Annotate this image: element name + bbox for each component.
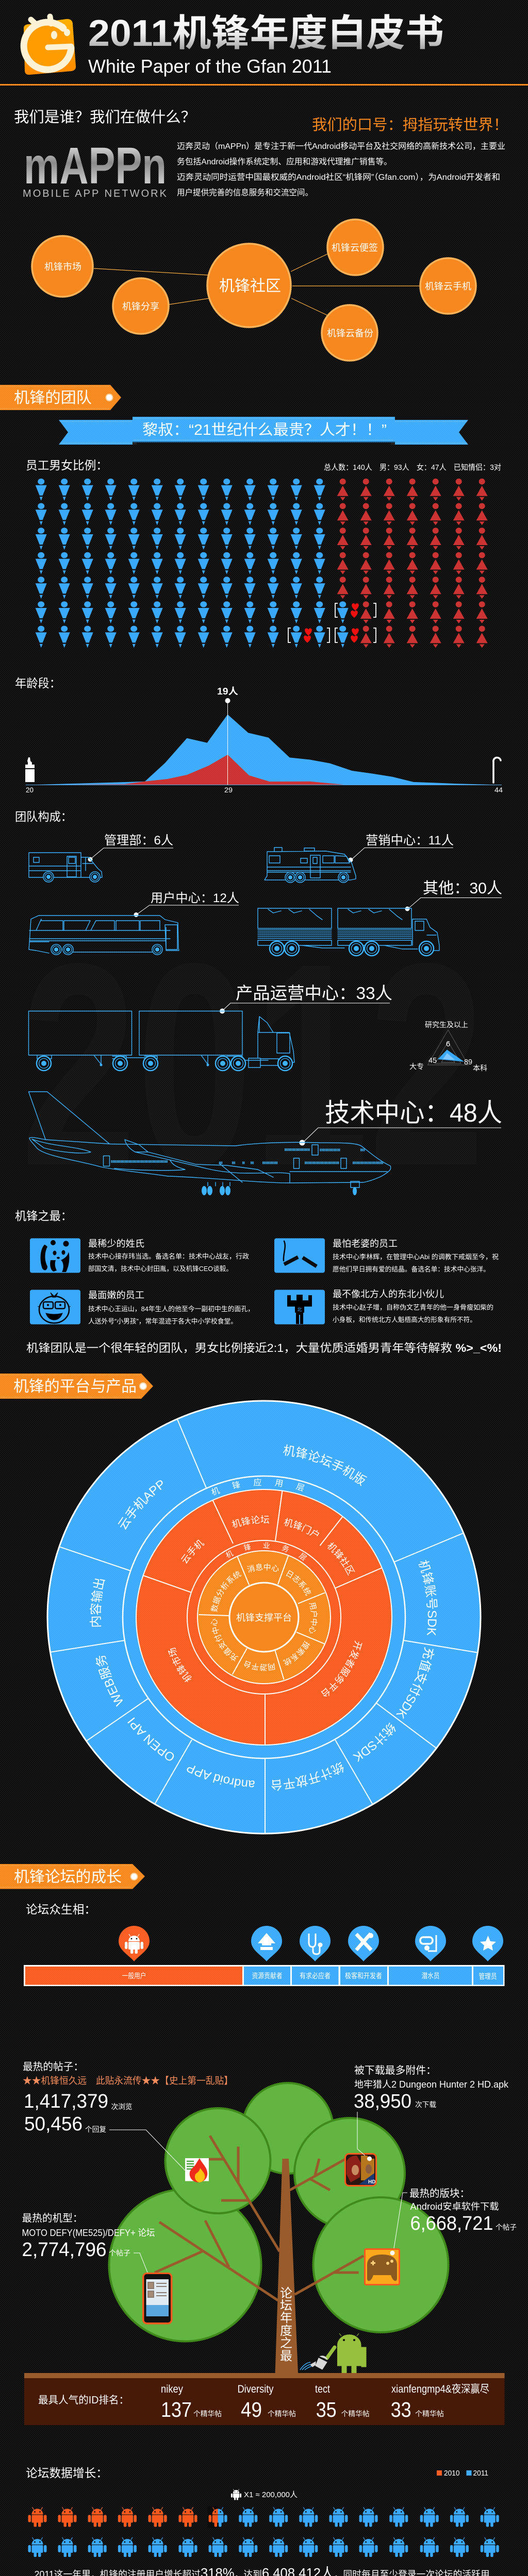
callout: others: 其他：30人	[423, 880, 502, 897]
vehicle: motorhome	[265, 848, 356, 883]
ring: support systems: 网游平台	[244, 1660, 275, 1671]
card: youngest-looking: 技术中心王运山，84年生人的他至今一副初中生的面孔，	[88, 1305, 254, 1313]
callout: hottest board: 6,668,721	[410, 2213, 493, 2234]
card: afraid of wife: 最怕老婆的员工	[333, 1239, 398, 1249]
callout: hottest post: 50,456	[24, 2113, 82, 2135]
ring: application layer: WEB服务	[96, 1656, 123, 1707]
radar chart: education	[409, 1021, 487, 1072]
company description	[177, 141, 505, 197]
callout: user center: 用户中心：12人	[151, 891, 239, 905]
icon: hot post	[185, 2158, 209, 2182]
pin: lurkers	[415, 1926, 446, 1961]
logo: Gfan	[24, 16, 76, 75]
legend: forum years	[437, 2469, 488, 2478]
callout: user center	[134, 891, 239, 917]
callout: most downloaded attachment: 被下载最多附件：	[354, 2064, 436, 2076]
radar chart: education: 本科	[473, 1064, 487, 1072]
label: on trunk: 之	[280, 2336, 292, 2350]
card: afraid of wife: 技术中心李林辉，在管理中心Abi 的调教下戒烟至今，祝	[333, 1253, 499, 1261]
ring: application layer	[46, 1400, 482, 1834]
network diagram: 机锋社区	[219, 278, 281, 295]
ribbon quote	[59, 417, 468, 445]
label: on trunk: 年	[280, 2311, 292, 2325]
pin: admins	[472, 1926, 503, 1961]
ring: support systems: 日志系统	[286, 1570, 311, 1596]
callout: hottest post: ★★机锋恒久远 此贴永流传★★【史上第一乱贴】	[23, 2075, 233, 2086]
callout: product operations: 产品运营中心：33人	[236, 984, 392, 1003]
ring: application layer: 云手机APP	[118, 1480, 163, 1530]
callout: others	[405, 880, 502, 911]
callout: hottest post: 1,417,379	[24, 2091, 108, 2112]
mAPPn logo: mAPPn	[24, 137, 167, 195]
ring: application layer: 机锋账号SDK	[418, 1560, 438, 1635]
slogan: 我们的口号：拇指玩转世界！	[312, 116, 508, 133]
callout: marketing	[349, 834, 454, 862]
icon: cane	[493, 757, 501, 783]
heading: the most of Gfan: 机锋之最：	[15, 1209, 72, 1223]
ring: business layer: 机锋市场	[168, 1648, 192, 1682]
panel: most popular IDs: 137	[161, 2398, 192, 2421]
card: northeast guy	[274, 1289, 493, 1324]
card: rarest surname	[30, 1239, 249, 1273]
title: 2011机锋年度白皮书	[88, 13, 444, 54]
icon: Dungeon Hunter: HD	[368, 2179, 375, 2185]
vehicle: coach bus	[29, 916, 179, 955]
ring: support systems: 搜索系统	[283, 1640, 310, 1666]
ribbon quote: 黎叔：“21世纪什么最贵？人才！！”	[142, 421, 387, 438]
card: northeast guy: 北	[297, 1307, 302, 1312]
stacked bar: forum types: 资源贡献者	[252, 1972, 283, 1980]
area chart: age: 20	[26, 786, 34, 794]
card: afraid of wife: 愿他们早日拥有爱的结晶。备选名单：技术中心张洋。	[333, 1265, 490, 1273]
callout: hottest model: MOTO DEFY(ME525)/DEFY+ 论坛	[22, 2228, 155, 2238]
callout: technology	[299, 1098, 502, 1146]
vehicle: ambulance	[29, 853, 102, 882]
stacked bar: forum types: 极客和开发者	[345, 1972, 382, 1980]
callout: hottest model: 最热的机型：	[22, 2212, 82, 2224]
ring: application layer: 统计开放平台	[271, 1762, 343, 1791]
callout: management	[88, 834, 173, 861]
legend: forum years: 2010	[444, 2469, 460, 2478]
ring: application layer: OPEN API	[127, 1717, 174, 1761]
callout: most downloaded attachment: 次下载	[415, 2100, 436, 2109]
section banner: forum	[0, 1864, 145, 1889]
panel: most popular IDs: 49	[241, 2398, 262, 2421]
card: rarest surname: 最稀少的姓氏	[88, 1239, 144, 1249]
vehicle: twin truck	[258, 908, 439, 956]
icon: android watering	[300, 2333, 366, 2373]
company description: 迈奔灵动同时运营中国最权威的Android社区“机锋网”（Gfan.com），为Android开发者和	[177, 173, 500, 182]
callout: most downloaded attachment: 地牢猎人2 Dungeon Hunter 2 HD.apk	[354, 2079, 509, 2090]
panel: most popular IDs: Diversity	[237, 2383, 274, 2395]
icon: Dungeon Hunter	[344, 2153, 377, 2187]
card: northeast guy: 最不像北方人的东北小伙儿	[333, 1289, 444, 1299]
stacked bar: forum types: 潜水员	[422, 1972, 439, 1980]
company description: 用户提供完善的信息服务和交流空间。	[177, 188, 313, 197]
radar chart: education: 45	[428, 1056, 437, 1065]
card: rarest surname: 技术中心接存玮当选。备选名单：技术中心战友，行政	[88, 1252, 249, 1260]
callout: most downloaded attachment: 38,950	[354, 2091, 411, 2112]
card: northeast guy: 技术中心赵子增，自称伪文艺青年的他一身骨瘦如柴的	[333, 1303, 493, 1311]
callout: technology: 技术中心：48人	[325, 1098, 502, 1127]
mAPPn logo: MOBILE APP NETWORK	[23, 188, 167, 199]
label: on trunk	[280, 2286, 292, 2363]
stacked bar: forum types: 有求必应者	[300, 1972, 331, 1980]
stacked bar: forum types: 管理员	[478, 1972, 497, 1980]
key: forum users: X1 ≈ 200,000人	[244, 2490, 298, 2499]
subtitle: White Paper of the Gfan 2011	[88, 56, 332, 77]
key: forum users	[231, 2489, 298, 2500]
centre: support platform: 机锋支撑平台	[236, 1613, 292, 1623]
radar chart: education: 大专	[409, 1062, 424, 1071]
team summary: 机锋团队是一个很年轻的团队，男女比例接近2:1，大量优质适婚男青年等待解救 %>_<%!	[26, 1342, 502, 1354]
ring: support systems: 数据分析系统	[210, 1571, 241, 1613]
panel: most popular IDs: xianfengmp4&夜深赢尽	[391, 2383, 489, 2395]
label: on trunk: 最	[280, 2349, 292, 2363]
network diagram: 机锋市场	[44, 262, 81, 272]
panel: most popular IDs: 最具人气的ID排名：	[38, 2394, 129, 2406]
pin: ordinary users	[119, 1926, 150, 1961]
callout: hottest board: 最热的版块：	[409, 2188, 470, 2199]
card: afraid of wife	[274, 1239, 499, 1273]
label: on trunk: 度	[280, 2324, 292, 2338]
area chart: age	[26, 686, 503, 794]
ring: application layer: 内容输出	[90, 1579, 105, 1627]
callout: hottest post: 次浏览	[111, 2103, 132, 2111]
radar chart: education: 6	[446, 1040, 450, 1048]
callout: hottest model: 个帖子	[109, 2249, 130, 2257]
company description: 迈奔灵动（mAPPn）是专注于新一代Android移动平台及社交网络的高新技术公司，主要业	[177, 141, 505, 151]
label: on trunk: 论	[280, 2286, 292, 2300]
section banner: platform	[0, 1374, 153, 1399]
callout: management: 管理部：6人	[104, 834, 173, 848]
card: youngest-looking	[30, 1290, 254, 1325]
callout: most downloaded attachment	[354, 2064, 509, 2161]
ring: support systems: 用户中心	[309, 1602, 318, 1633]
callout: product operations	[220, 984, 392, 1014]
ring: business layer: 机锋论坛	[232, 1515, 269, 1528]
panel: most popular IDs: 个精华帖	[193, 2410, 222, 2418]
ring: business layer: 机锋业务层	[226, 1541, 307, 1561]
vehicle: airplane	[29, 1092, 391, 1195]
callout: hottest board	[393, 2188, 517, 2251]
card: northeast guy: 小身板，和传统北方人魁梧高大的形象有所不符。	[333, 1316, 476, 1324]
callout: hottest post	[23, 2061, 233, 2171]
callout: hottest board: 个帖子	[496, 2223, 517, 2231]
ring: application layer: 充值支付SDK	[396, 1647, 434, 1719]
network diagram	[32, 219, 476, 361]
panel: most popular IDs: 35	[316, 2398, 337, 2421]
heading: gender ratio: 员工男女比例：	[26, 459, 108, 472]
callout: hottest post: 个回复	[85, 2125, 106, 2133]
pin: contributors	[251, 1926, 282, 1961]
ring: support systems: 充值支付中心	[210, 1619, 238, 1661]
icon: baby bottle	[25, 757, 35, 782]
heading: forum data growth: 论坛数据增长：	[26, 2466, 108, 2480]
heading: forum types: 论坛众生相：	[26, 1903, 96, 1916]
callout: hottest post: 最热的帖子：	[23, 2061, 84, 2073]
area chart: age: 19人	[217, 686, 238, 697]
pin: helpers	[300, 1926, 331, 1961]
pictogram: forum registered users	[28, 2506, 499, 2557]
callout: hottest model	[22, 2212, 155, 2279]
radar chart: education: 研究生及以上	[425, 1021, 468, 1029]
callout: hottest model: 2,774,796	[22, 2239, 106, 2261]
section banner: platform: 机锋的平台与产品	[13, 1378, 137, 1395]
orange divider	[0, 84, 528, 86]
stacked bar: forum types	[24, 1965, 504, 1986]
card: youngest-looking: 人送外号“小男孩”，常年混迹于各大中小学校食堂。	[88, 1317, 237, 1325]
ring: support systems	[197, 1550, 331, 1684]
icon: Motorola phone	[142, 2273, 172, 2325]
radial chart: platform and products	[46, 1400, 482, 1834]
ring: business layer: 机锋社区	[327, 1543, 355, 1575]
panel: most popular IDs: 个精华帖	[415, 2410, 444, 2418]
network diagram: 机锋分享	[122, 301, 159, 312]
company description: 务包括Android操作系统定制、应用和游戏代理推广销售等。	[177, 157, 392, 166]
area chart: age: 44	[494, 786, 503, 794]
panel: most popular IDs: 33	[391, 2398, 411, 2421]
card: rarest surname: 部国文清，技术中心封田胤，以及机锋CEO谈毅。	[88, 1265, 233, 1273]
panel: most popular IDs	[24, 2373, 504, 2425]
ring: application layer: 机锋论坛手机版	[283, 1445, 367, 1486]
heading: team composition: 团队构成：	[15, 810, 72, 823]
centre: support platform	[229, 1583, 299, 1652]
section banner: team	[0, 385, 121, 410]
label: on trunk: 坛	[280, 2299, 292, 2313]
area chart: age: 29	[224, 786, 233, 794]
vehicle: road train	[29, 1011, 294, 1071]
pictogram: staff	[36, 479, 488, 648]
network diagram: 机锋云便签	[332, 243, 378, 253]
callout: hottest board: Android安卓软件下载	[410, 2201, 499, 2212]
legend: forum years: 2011	[473, 2469, 488, 2478]
callout: marketing: 营销中心：11人	[366, 834, 454, 848]
ring: application layer: 机锋应用层	[211, 1478, 304, 1496]
network diagram: 机锋云备份	[327, 328, 373, 338]
tree illustration	[109, 2083, 449, 2373]
ring: business layer: 云手机	[181, 1539, 204, 1564]
ring: business layer: 开发者服务平台	[321, 1640, 362, 1697]
icon: game controller	[364, 2248, 400, 2285]
heading: who we are: 我们是谁？我们在做什么？	[14, 109, 196, 126]
panel: most popular IDs: tect	[315, 2383, 330, 2395]
ring: business layer	[136, 1489, 392, 1745]
radar chart: education: 89	[464, 1058, 472, 1066]
pin: geeks and developers	[348, 1926, 379, 1961]
ring: support systems: 消息中心	[247, 1563, 278, 1573]
section banner: team: 机锋的团队	[14, 389, 92, 406]
panel: most popular IDs: 个精华帖	[268, 2410, 296, 2418]
panel: most popular IDs: nikey	[161, 2383, 183, 2395]
card: youngest-looking: 最面嫩的员工	[88, 1290, 144, 1300]
ring: application layer: 统计SDK	[353, 1723, 396, 1762]
ring: application layer: android APP	[187, 1766, 255, 1788]
staff counts: 总人数：140人 男：93人 女：47人 已知情侣：3对	[324, 463, 501, 472]
stacked bar: forum types: 一般用户	[122, 1972, 146, 1980]
heading: age: 年龄段：	[15, 676, 61, 690]
ring: business layer: 机锋门户	[284, 1518, 320, 1536]
section banner: forum: 机锋论坛的成长	[14, 1869, 122, 1886]
network diagram: 机锋云手机	[425, 281, 471, 292]
panel: most popular IDs: 个精华帖	[341, 2410, 370, 2418]
